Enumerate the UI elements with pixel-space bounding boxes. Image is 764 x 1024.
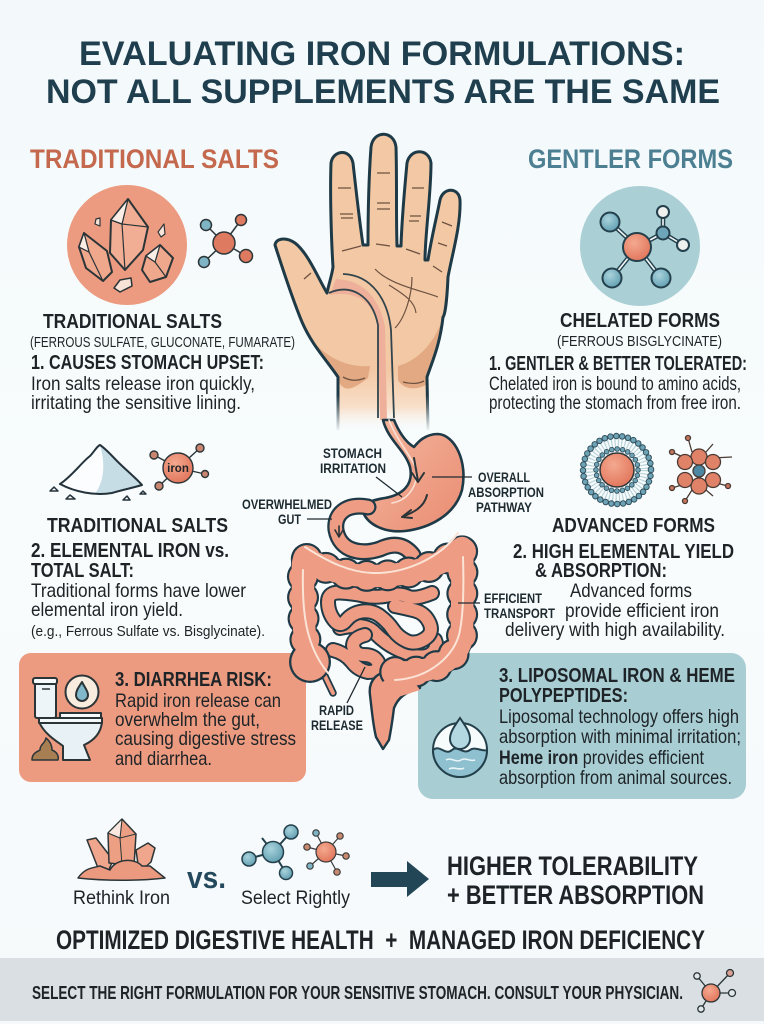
label: overall absorption pathway: OVERALL [478,470,530,485]
label: stomach irritation [320,446,402,497]
text block: traditional salts 2: TOTAL SALT: [31,559,134,582]
text block: advanced forms: ADVANCED FORMS [552,514,715,537]
heading: traditional salts: TRADITIONAL SALTS [30,144,279,174]
text block: traditional salts 1: Iron salts release iron quickly, [31,373,255,395]
text block: traditional salts 1: TRADITIONAL SALTS [43,310,222,333]
text block: traditional salts 1 [30,310,295,414]
label: overall absorption pathway: ABSORPTION [468,485,544,500]
label: overall absorption pathway: PATHWAY [476,500,532,515]
icon: iron salt crystals [67,185,187,305]
diarrhea text [115,668,296,770]
diarrhea text: overwhelm the gut, [115,709,260,731]
icon: orange molecule [304,830,349,875]
vs: vs. [187,860,226,895]
liposomal text: POLYPEPTIDES: [499,684,628,707]
label: rethink iron: Rethink Iron [73,887,170,909]
text block: traditional salts 2: TRADITIONAL SALTS [47,514,228,537]
label: stomach irritation: STOMACH [323,446,382,461]
conclusion text: HIGHER TOLERABILITY [447,851,698,881]
diarrhea text: causing digestive stress [115,728,296,750]
label: select rightly: Select Rightly [241,887,350,909]
label: rapid release: RAPID [319,703,354,718]
diarrhea text: and diarrhea. [115,748,212,770]
title: NOT ALL SUPPLEMENTS ARE THE SAME [46,73,720,111]
conclusion text [447,851,704,910]
text block: traditional salts 2: (e.g., Ferrous Sulfate vs. Bisglycinate). [31,623,265,640]
text block: chelated forms [489,309,747,414]
text block: traditional salts 2: 2. ELEMENTAL IRON vs. [31,539,229,562]
icon: toilet [32,676,102,760]
panel: liposomal iron and heme polypeptides [418,653,746,799]
diarrhea text: Rapid iron release can [115,690,281,712]
label: rapid release: RELEASE [311,718,363,733]
text block: traditional salts 2 [31,514,265,640]
icon: digestive tract [289,420,463,749]
title [46,35,720,111]
text block: traditional salts 2: Traditional forms have lower [31,580,246,602]
label: efficient transport: EFFICIENT [484,591,543,606]
arrow [371,861,429,897]
icon: molecule in teal circle [580,186,700,306]
icon: footer molecule [694,970,736,1012]
small intestine [328,592,436,672]
label: overall absorption pathway [432,470,544,515]
text block: chelated forms: CHELATED FORMS [560,309,720,332]
footer bar [0,958,764,1021]
icon: liposome [583,436,651,504]
liposomal text: Heme iron provides efficient [499,747,704,769]
icon: crystal cluster [78,819,165,880]
conclusion text: + BETTER ABSORPTION [447,880,704,910]
label: rapid release [311,667,365,733]
icon: hand [275,134,460,430]
text block: traditional salts 1: 1. CAUSES STOMACH UPSET: [31,351,264,374]
icon: iron molecule [150,444,208,490]
icon: water drop [433,718,487,777]
text block: traditional salts 1: irritating the sensitive lining. [31,392,241,414]
icon: teal molecule [242,825,298,880]
text block: traditional salts 2: elemental iron yield. [31,599,183,621]
label: stomach irritation: IRRITATION [320,461,386,476]
heading: gentler forms: GENTLER FORMS [528,144,733,174]
text block: advanced forms: & ABSORPTION: [535,559,667,582]
esophagus and stomach [363,420,463,531]
icon: heme porphyrin [670,436,732,504]
text block: advanced forms: delivery with high availability. [505,619,725,641]
icon: powder pile [50,445,146,500]
label: efficient transport: TRANSPORT [484,606,556,621]
icon: iron molecule: iron [167,463,189,475]
diarrhea text: 3. DIARRHEA RISK: [115,668,272,691]
duodenum [335,506,413,555]
label: overwhelmed gut [242,497,332,527]
text block: traditional salts 1: (FERROUS SULFATE, GLUCONATE, FUMARATE) [30,334,295,351]
label: efficient transport [458,591,556,621]
large intestine [289,533,463,749]
title: EVALUATING IRON FORMULATIONS: [79,35,685,73]
liposomal text [499,664,741,789]
panel: diarrhea risk [19,653,306,782]
label: overwhelmed gut: OVERWHELMED [242,497,332,512]
text block: advanced forms [505,514,734,641]
text block: chelated forms: (FERROUS BISGLYCINATE) [557,333,722,350]
text block: advanced forms: provide efficient iron [565,600,719,622]
icon: salt molecule [198,214,252,268]
text block: advanced forms: Advanced forms [570,580,692,602]
label: overwhelmed gut: GUT [278,512,302,527]
